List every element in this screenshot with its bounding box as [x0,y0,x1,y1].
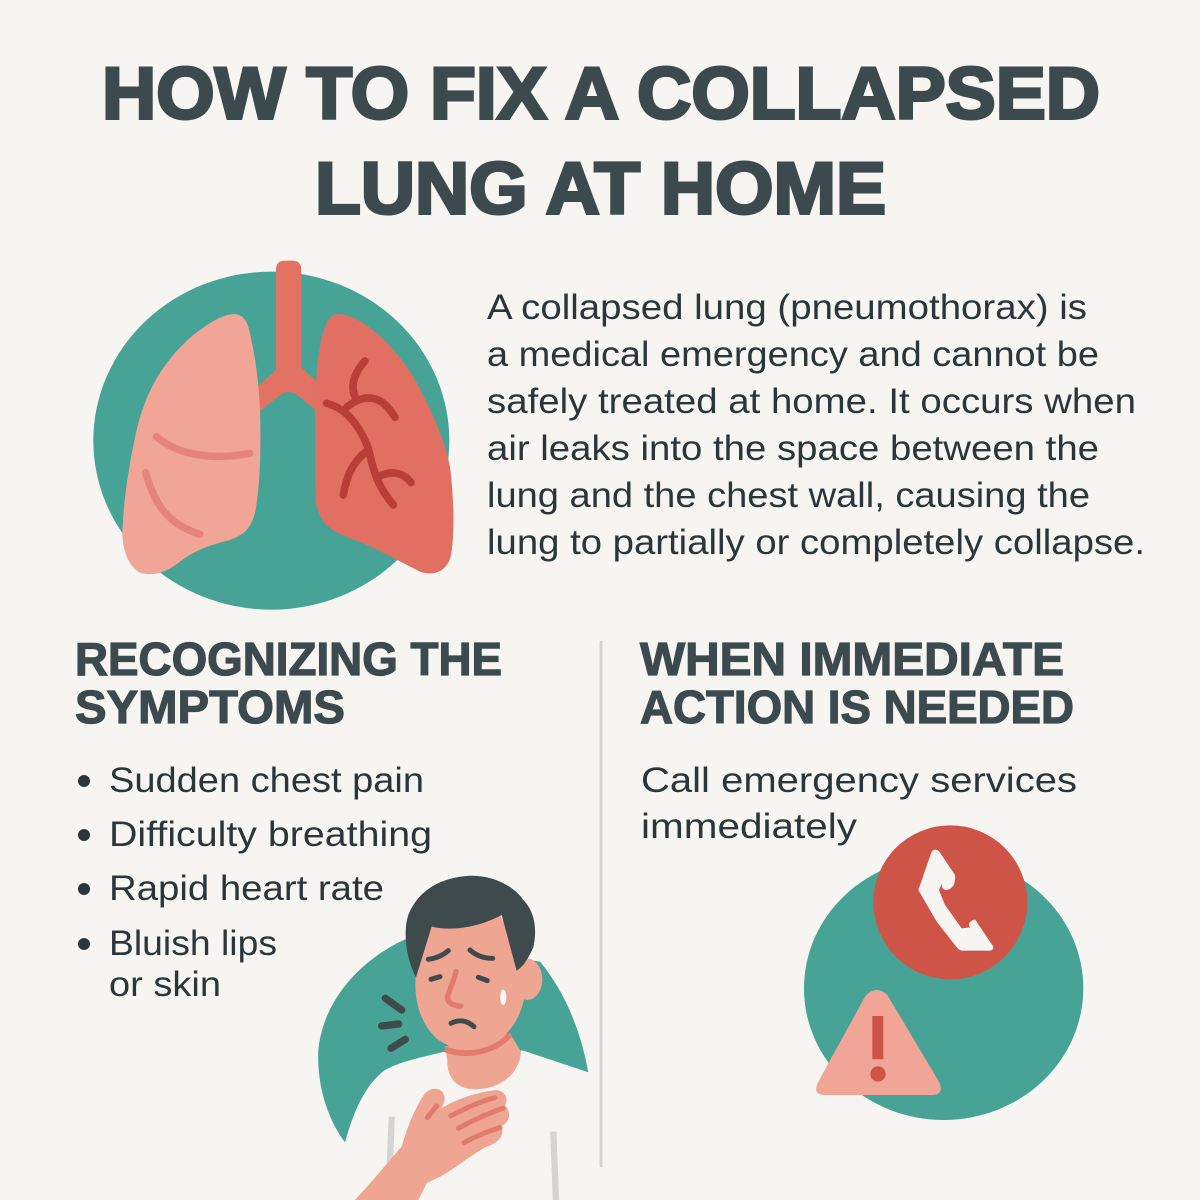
pain lines [382,998,405,1048]
heading: when immediate action is needed [640,633,1074,733]
title: HOW TO FIX A COLLAPSED [102,54,1100,134]
symptoms list: Sudden chest pain [109,761,424,800]
vertical divider [600,641,602,1167]
heading: recognizing the symptoms [75,633,502,733]
left lung, collapsed pale [122,314,260,574]
right lung, healthy dark [315,314,453,574]
intro paragraph: lung and the chest wall, causing the [487,476,1090,515]
bronchial branches [327,361,411,505]
intro paragraph: A collapsed lung (pneumothorax) is [487,288,1087,327]
heading: when immediate action is needed: WHEN IMMEDIATE [640,633,1064,685]
ear [512,959,542,1000]
symptoms list: Difficulty breathing [109,815,432,854]
call to action text [641,761,1077,846]
intro paragraph: lung to partially or completely collapse. [487,523,1145,562]
icon: emergency phone and warning [804,825,1083,1120]
intro paragraph [487,288,1145,562]
call to action text: immediately [641,807,858,846]
heading: when immediate action is needed: ACTION IS NEEDED [640,681,1074,733]
trachea and bronchi [257,261,320,413]
neck crease [445,1035,510,1053]
tear [500,990,506,1005]
hair [406,876,535,977]
facial features [428,950,493,1027]
warning triangle [816,990,941,1095]
teal circle behind lungs [93,272,449,610]
symptoms list: Bluish lips [109,924,277,963]
title: LUNG AT HOME [315,148,886,230]
call to action text: Call emergency services [641,761,1077,800]
teal backdrop [318,939,588,1142]
hand on chest [355,1089,509,1200]
symptoms list [78,761,432,1004]
icon: lungs illustration [93,261,453,610]
intro paragraph: air leaks into the space between the [487,429,1099,468]
finger lines [427,1098,503,1143]
neck [445,1033,521,1089]
phone badge [873,825,1027,979]
intro paragraph: safely treated at home. It occurs when [487,382,1136,421]
symptoms list: Rapid heart rate [109,869,384,908]
intro paragraph: a medical emergency and cannot be [487,335,1099,374]
teal circle [804,857,1083,1120]
heading: recognizing the symptoms: SYMPTOMS [75,681,345,733]
symptoms list: or skin [109,965,221,1004]
heading: recognizing the symptoms: RECOGNIZING THE [75,633,502,685]
face [415,915,525,1049]
title [102,54,1100,230]
collapsed lung fold lines [146,437,250,534]
shirt seams [390,1117,556,1200]
icon: man holding chest [318,876,588,1200]
